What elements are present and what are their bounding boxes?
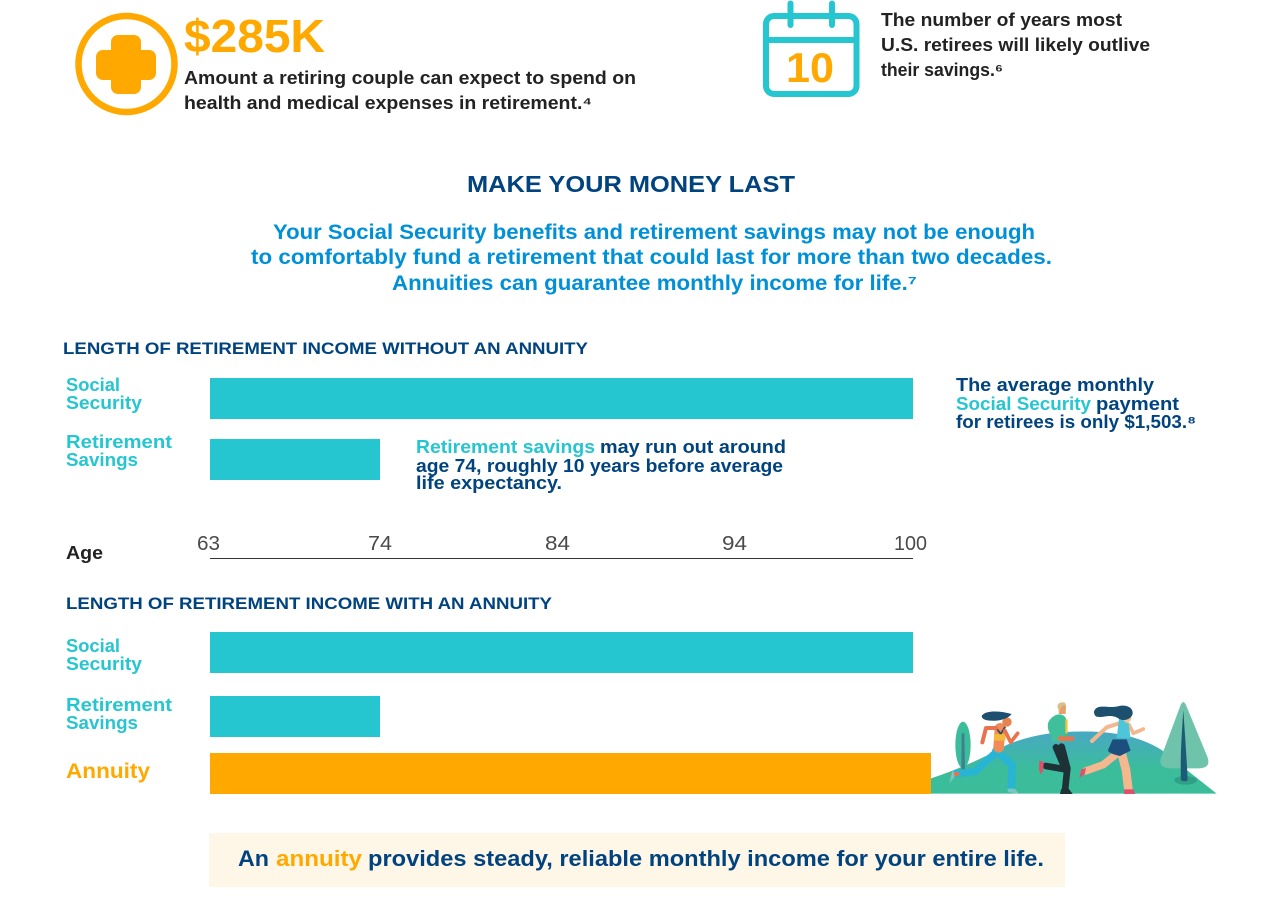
note: average social security payment: for retirees is only $1,503.⁸ — [956, 412, 1196, 432]
icon: calendar with 10: 10 — [786, 44, 834, 91]
big tree — [1160, 702, 1208, 785]
small tree — [955, 722, 971, 769]
callout: annuity summary: annuity — [276, 846, 363, 871]
note: average social security payment: Social Security — [956, 394, 1091, 414]
bar: retirement savings with annuity — [210, 696, 380, 737]
label: annuity: Annuity — [66, 760, 150, 783]
runner 1 — [949, 711, 1019, 794]
runner 2 — [1039, 702, 1073, 794]
callout: annuity summary: provides steady, reliable monthly income for your entire life. — [368, 846, 1044, 871]
stat: $285K medical expenses: health and medical expenses in retirement.⁴ — [184, 93, 592, 113]
note: savings run out: may run out around — [600, 437, 786, 457]
stat: years outliving savings: their savings.⁶ — [881, 60, 1003, 80]
label: social security (with annuity): Social — [66, 636, 120, 656]
note: savings run out: Retirement savings — [416, 437, 595, 457]
label: social security — [66, 375, 142, 413]
stat: $285K medical expenses: $285K — [184, 10, 325, 62]
label: retirement savings (with annuity): Savings — [66, 713, 138, 733]
heading: with an annuity: LENGTH OF RETIREMENT INCOME WITH AN ANNUITY — [66, 594, 553, 613]
icon: medical cross — [78, 16, 174, 112]
stat: years outliving savings — [881, 10, 1150, 80]
stat: $285K medical expenses: Amount a retiring couple can expect to spend on — [184, 68, 636, 88]
age axis: 74 — [368, 533, 392, 555]
age axis: Age — [66, 543, 103, 563]
illustration: runners on a hill — [931, 702, 1217, 794]
note: average social security payment — [956, 375, 1196, 432]
intro text: Annuities can guarantee monthly income for life.⁷ — [392, 272, 917, 295]
intro text: Your Social Security benefits and retirement savings may not be enough — [273, 221, 1035, 244]
label: social security (with annuity): Security — [66, 654, 142, 674]
heading: make your money last: MAKE YOUR MONEY LAST — [467, 171, 795, 197]
label: social security: Security — [66, 393, 142, 413]
bar: retirement savings to age 74 — [210, 439, 380, 480]
stat: years outliving savings: The number of years most — [881, 10, 1122, 30]
label: social security: Social — [66, 375, 120, 395]
note: savings run out: age 74, roughly 10 years before average — [416, 456, 783, 476]
age axis: 100 — [894, 533, 927, 555]
intro text: to comfortably fund a retirement that could last for more than two decades. — [251, 246, 1052, 269]
note: savings run out — [416, 437, 786, 493]
bar: social security to age 100 — [210, 378, 913, 419]
icon: calendar with 10 — [766, 4, 856, 94]
note: average social security payment: The average monthly — [956, 375, 1154, 395]
label: social security (with annuity) — [66, 636, 142, 674]
note: savings run out: life expectancy. — [416, 473, 562, 493]
age axis: 63 — [197, 533, 220, 555]
bar: social security with annuity — [210, 632, 913, 673]
age axis: 94 — [722, 533, 747, 555]
label: retirement savings (with annuity): Retirement — [66, 695, 172, 715]
bar: annuity — [210, 753, 931, 794]
runner 3 — [1079, 706, 1143, 794]
heading: without an annuity: LENGTH OF RETIREMENT INCOME WITHOUT AN ANNUITY — [63, 339, 589, 358]
note: average social security payment: payment — [1096, 394, 1179, 414]
callout: annuity summary — [209, 833, 1065, 887]
age axis: 84 — [545, 533, 570, 555]
label: retirement savings — [66, 432, 172, 470]
stat: $285K medical expenses — [184, 10, 636, 113]
intro text — [251, 221, 1052, 295]
stat: years outliving savings: U.S. retirees will likely outlive — [881, 35, 1150, 55]
callout: annuity summary: An — [238, 846, 269, 871]
age axis — [66, 533, 927, 563]
label: retirement savings: Retirement — [66, 432, 172, 452]
label: retirement savings (with annuity) — [66, 695, 172, 733]
label: retirement savings: Savings — [66, 450, 138, 470]
